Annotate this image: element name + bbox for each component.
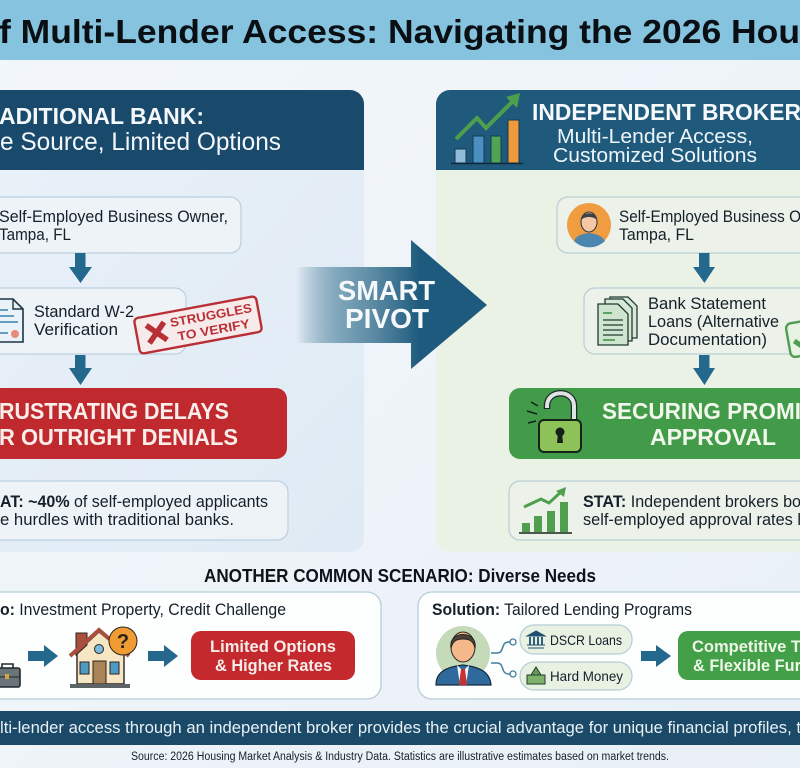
smart pivot arrow: PIVOT: [345, 303, 429, 334]
icon: briefcase: [0, 664, 20, 687]
card: solution: Solution: Tailored Lending Programs: [432, 600, 692, 619]
source note: Source: 2026 Housing Market Analysis & Industry Data. Statistics are illustrative estimates based on market trends.: [131, 751, 669, 763]
borrower card: Tampa, FL: [0, 226, 71, 244]
pill: hard money: [510, 662, 632, 690]
icon: borrower avatar: [567, 203, 611, 247]
stat card: traditional: AT: ~40% of self-employed applicants: [0, 493, 268, 511]
stat card: traditional: [0, 481, 288, 540]
icon: house with question mark: [70, 627, 137, 688]
stamp: struggles to verify: TO VERIFY: [177, 317, 252, 344]
bank statement card: Bank Statement: [648, 295, 766, 313]
smart pivot arrow: [296, 240, 487, 369]
borrower card: [557, 197, 800, 253]
pill: hard money: Hard Money: [550, 668, 623, 684]
green result box: [678, 631, 800, 680]
borrower card: Tampa, FL: [619, 226, 694, 244]
bank statement card: Documentation): [648, 331, 767, 349]
panel heading: traditional bank: ADITIONAL BANK:: [0, 103, 204, 129]
icon: stat chart: [519, 487, 572, 533]
red result box: & Higher Rates: [215, 656, 332, 675]
panel heading: traditional bank: [0, 90, 364, 170]
takeaway banner: lti-lender access through an independent broker provides the crucial advantage for unique financial profiles, t: [0, 718, 800, 737]
arrow: right: [641, 645, 671, 667]
arrow: right: [28, 645, 58, 667]
W-2 verification card: [0, 288, 186, 354]
icon: open padlock: [527, 393, 581, 452]
green outcome box: APPROVAL: [650, 424, 776, 450]
takeaway banner: [0, 711, 800, 745]
stamp: struggles to verify: [134, 296, 262, 354]
borrower card: [0, 197, 241, 253]
connectors: [491, 642, 512, 674]
arrow: down: [693, 253, 715, 283]
panel heading: independent broker: [436, 90, 800, 170]
panel: traditional bank: [0, 90, 364, 552]
icon: broker: [436, 626, 491, 685]
bank statement card: Loans (Alternative: [648, 313, 779, 331]
panel heading: independent broker: Customized Solutions: [553, 145, 757, 167]
arrow: down: [69, 253, 92, 283]
title banner: f Multi-Lender Access: Navigating the 2026 Hou: [0, 13, 800, 50]
red result box: Limited Options: [210, 637, 336, 656]
bank statement card: [584, 288, 800, 354]
stat card: independent: [509, 481, 800, 540]
panel heading: independent broker: Multi-Lender Access,: [557, 126, 753, 148]
arrow: down: [693, 355, 715, 385]
panel heading: independent broker: INDEPENDENT BROKER: [532, 99, 800, 125]
green outcome box: SECURING PROMI: [602, 398, 800, 424]
icon: growth chart: [451, 93, 523, 164]
pill: DSCR loans: DSCR Loans: [550, 632, 622, 648]
red result box: [191, 631, 355, 680]
card: scenario: o: Investment Property, Credit Challenge: [0, 600, 286, 619]
card: scenario: [0, 592, 381, 699]
W-2 verification card: Standard W-2: [34, 303, 134, 321]
stat card: traditional: e hurdles with traditional banks.: [0, 511, 234, 529]
stat card: independent: self-employed approval rates l: [583, 511, 800, 529]
stat card: independent: STAT: Independent brokers bo: [583, 493, 800, 511]
card: solution: [418, 592, 800, 699]
red outcome box: R OUTRIGHT DENIALS: [0, 424, 238, 450]
title banner: [0, 0, 800, 60]
stamp: struggles to verify: STRUGGLES: [169, 301, 253, 330]
pill: DSCR loans: [510, 625, 632, 654]
borrower card: Self-Employed Business Owner,: [0, 208, 228, 226]
section heading: another common scenario: ANOTHER COMMON SCENARIO: Diverse Needs: [204, 566, 596, 586]
stamp: approved check: [785, 317, 800, 358]
arrow: down: [69, 355, 92, 385]
icon: bank statements: [598, 297, 637, 345]
red outcome box: [0, 388, 287, 459]
panel heading: traditional bank: e Source, Limited Options: [0, 128, 281, 156]
icon: house with question mark: ?: [117, 631, 129, 653]
green outcome box: [509, 388, 800, 459]
panel: independent broker: [436, 90, 800, 552]
smart pivot arrow: SMART: [338, 275, 435, 306]
arrow: right: [148, 645, 178, 667]
icon: W-2 document: [0, 299, 23, 342]
W-2 verification card: Verification: [34, 321, 118, 339]
red outcome box: RUSTRATING DELAYS: [0, 398, 229, 424]
